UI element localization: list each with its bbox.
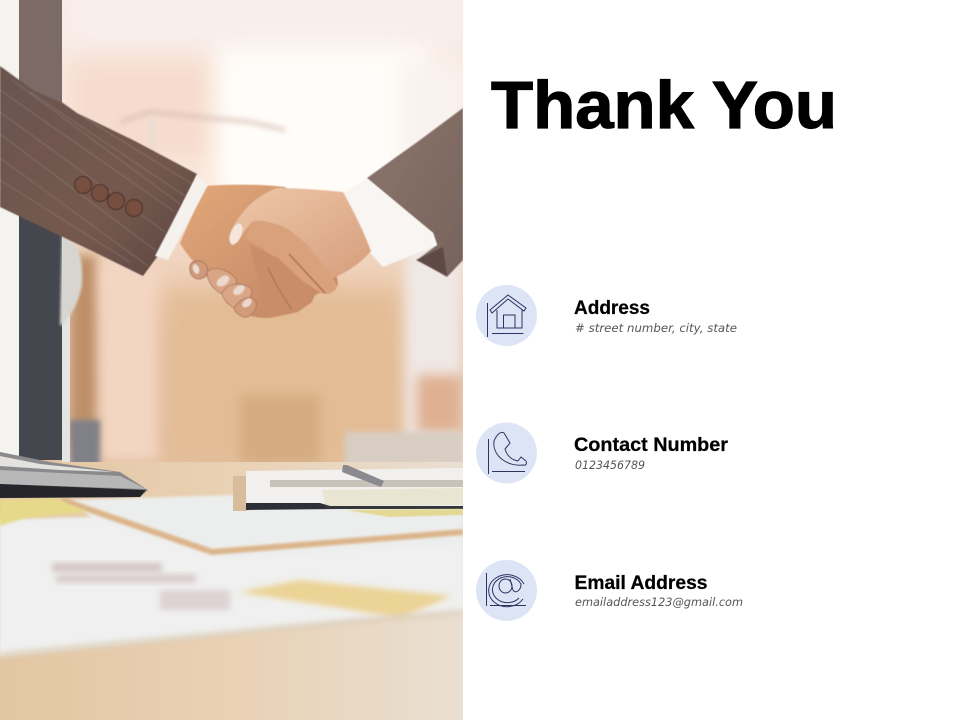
left shirt cuff xyxy=(155,175,208,260)
right hand, clasping xyxy=(227,188,371,318)
contact row: phone xyxy=(476,422,729,484)
photo: business handshake at a table xyxy=(0,0,482,720)
contact number heading: Contact Number xyxy=(574,435,729,456)
blurred papers on table xyxy=(0,488,463,656)
cuff buttons xyxy=(74,176,142,216)
address details: # street number, city, state xyxy=(575,321,737,335)
right shirt cuff xyxy=(352,182,438,268)
photo background: blurred office window xyxy=(0,0,482,470)
title: Thank You xyxy=(491,68,837,143)
left hand, gripping xyxy=(180,185,338,318)
icon: house xyxy=(476,285,537,346)
address heading: Address xyxy=(574,298,650,319)
table surface xyxy=(0,462,463,720)
magazine and pen, right xyxy=(233,465,463,517)
folder stack, left xyxy=(0,452,148,498)
contact row: email xyxy=(476,560,743,621)
icon: telephone xyxy=(476,422,537,484)
contact row: address xyxy=(476,285,737,346)
phone number: 0123456789 xyxy=(575,458,645,472)
icon: at sign xyxy=(476,560,537,621)
email address: emailaddress123@gmail.com xyxy=(575,595,743,609)
dark window pillar xyxy=(19,0,82,462)
email heading: Email Address xyxy=(574,573,708,594)
right suit sleeve xyxy=(367,108,463,277)
pen xyxy=(342,465,384,487)
left suit sleeve with buttons xyxy=(0,66,197,276)
